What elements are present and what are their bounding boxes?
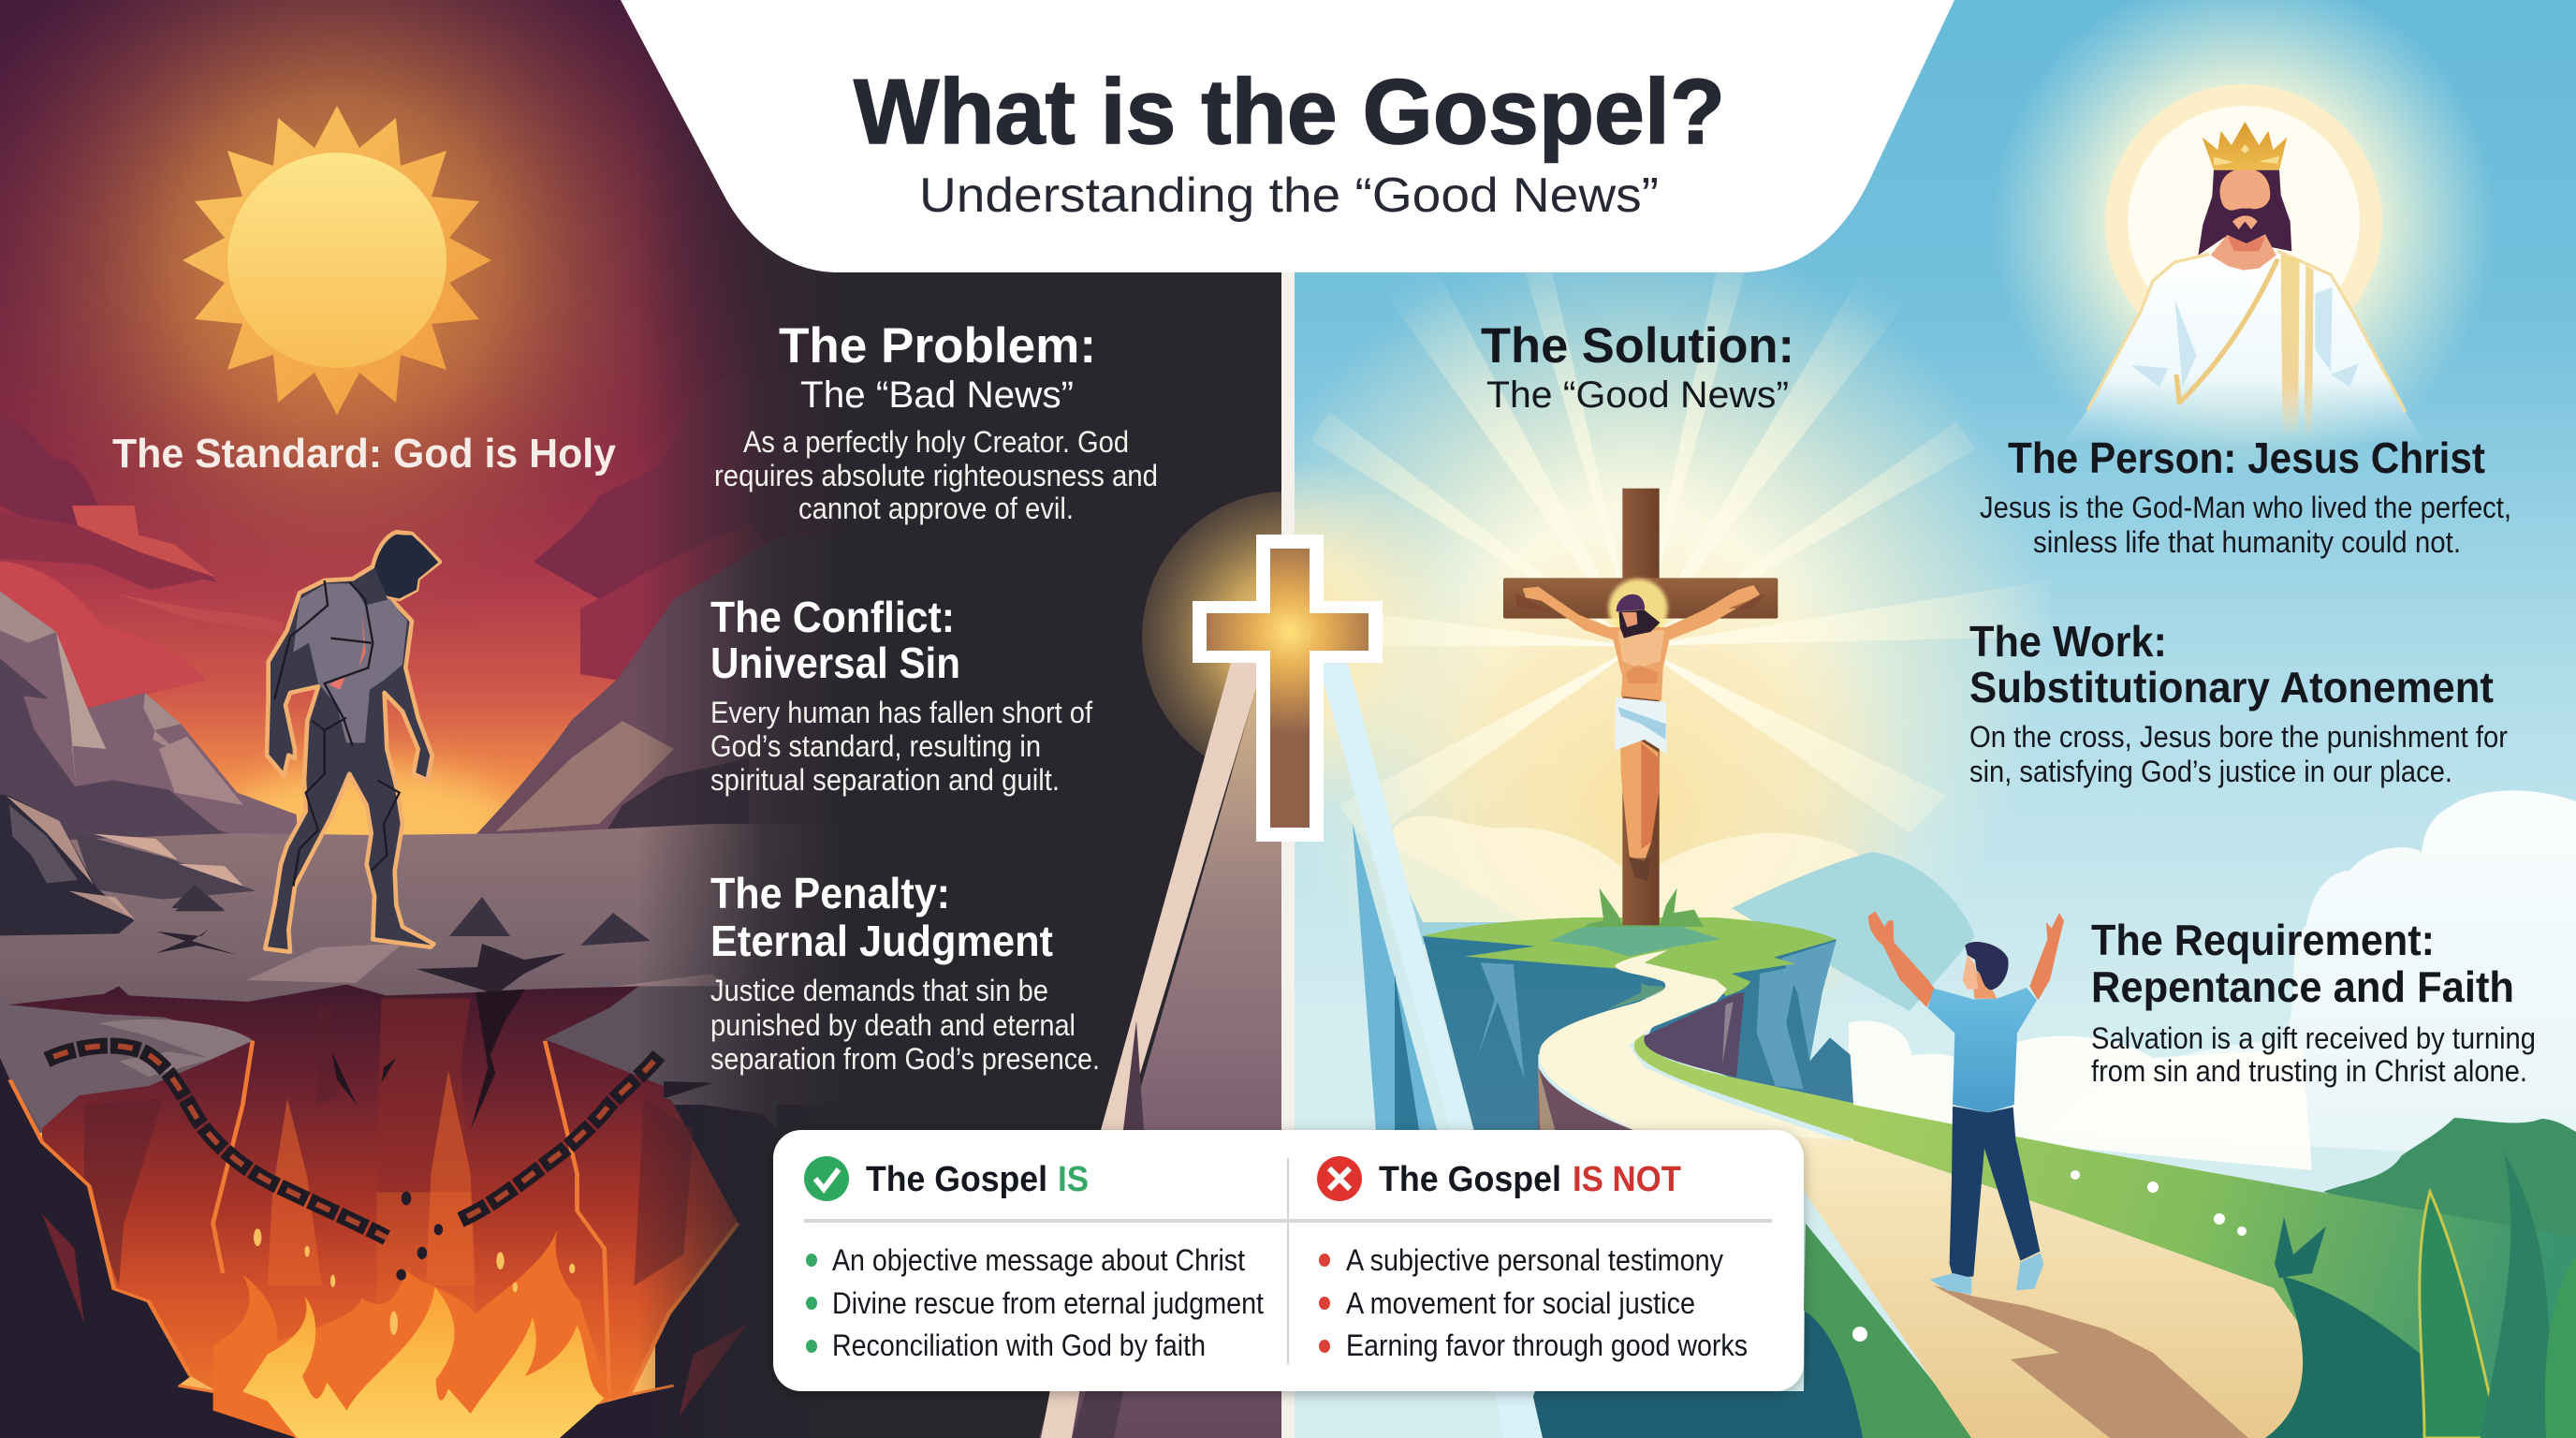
person shadow xyxy=(1933,1285,2248,1438)
cracked ground plateau xyxy=(0,794,824,1133)
robe xyxy=(2062,251,2424,443)
list: gospel is: Reconciliation with God by faith xyxy=(832,1328,1206,1362)
figure: person with raised arms xyxy=(1868,911,2064,1295)
dark rock behind pit's right wall xyxy=(655,1105,831,1438)
rock ledges xyxy=(7,1005,249,1128)
block: the penalty: Justice demands that sin be xyxy=(710,974,1048,1007)
glow disc behind the cross, dark side xyxy=(1142,492,1281,771)
block: the penalty: The Penalty: xyxy=(710,869,950,917)
subtitle: Understanding the “Good News” xyxy=(919,169,1659,223)
block: the work: sin, satisfying God’s justice in our place. xyxy=(1969,755,2452,788)
block: the solution: The “Good News” xyxy=(1486,374,1789,416)
clouds behind the figure xyxy=(0,374,805,880)
flames xyxy=(213,1229,609,1438)
block: the person: Jesus is the God-Man who lived the perfect, xyxy=(1980,491,2511,524)
big glowing cross in the centre xyxy=(1193,535,1383,842)
light rays behind the cross xyxy=(1310,272,2041,843)
block: the conflict: The Conflict: xyxy=(710,593,955,641)
figure: fallen man xyxy=(265,532,440,952)
block: the penalty: separation from God’s presence. xyxy=(710,1042,1100,1076)
icon: red cross xyxy=(1317,1156,1362,1201)
block: the solution: The Solution: xyxy=(1481,318,1794,374)
icon: crown xyxy=(2203,122,2287,170)
list: gospel is not: Earning favor through good works xyxy=(1346,1328,1748,1362)
block: the person: sinless life that humanity could not. xyxy=(2033,525,2461,559)
block: the conflict: God’s standard, resulting in xyxy=(710,729,1041,763)
blue path edge on right side xyxy=(1318,663,1543,1438)
block: the conflict: spiritual separation and guilt. xyxy=(710,763,1060,797)
block: the conflict: Every human has fallen short of xyxy=(710,696,1092,729)
cross and crucified figure xyxy=(1503,489,1778,927)
block: the problem xyxy=(714,318,1158,525)
list: gospel is: Divine rescue from eternal judgment xyxy=(832,1286,1264,1320)
list: gospel is not xyxy=(1319,1243,1748,1362)
heading: the gospel is: The Gospel xyxy=(866,1160,1047,1199)
block: the problem: requires absolute righteousness and xyxy=(714,459,1158,492)
lower road xyxy=(1632,1128,2380,1438)
block: the conflict xyxy=(710,593,1092,797)
mountains xyxy=(0,536,936,861)
block: the requirement: The Requirement: xyxy=(2091,916,2435,964)
glow beside big cross, light side xyxy=(1295,468,1433,794)
list: gospel is not: A movement for social justice xyxy=(1346,1286,1695,1320)
heading: the gospel is not: The Gospel xyxy=(1379,1160,1561,1199)
center light path on dark side xyxy=(1039,663,1281,1438)
block: the work xyxy=(1969,617,2508,788)
block: the work: The Work: xyxy=(1969,617,2167,666)
plants xyxy=(1852,1152,2576,1438)
block: the solution xyxy=(1481,318,1794,416)
heading: the gospel is not: IS NOT xyxy=(1573,1160,1681,1199)
list: gospel is xyxy=(806,1243,1264,1362)
block: the requirement xyxy=(2091,916,2536,1088)
island with winding path xyxy=(1423,917,1853,1145)
dark rocks xyxy=(0,1058,298,1438)
green field and winding road xyxy=(1423,917,2576,1438)
block: the penalty xyxy=(710,869,1100,1076)
block: the work: Substitutionary Atonement xyxy=(1969,663,2494,712)
block: the requirement: Salvation is a gift received by turning xyxy=(2091,1021,2536,1055)
fiery pit xyxy=(0,985,777,1438)
central white divider xyxy=(1281,272,1295,1438)
left panel: the problem scene xyxy=(0,0,1281,1438)
block: the work: On the cross, Jesus bore the punishment for xyxy=(1969,720,2508,754)
block: the problem: The Problem: xyxy=(779,318,1096,374)
dark text backdrop xyxy=(637,0,1281,1438)
block: the person xyxy=(1980,433,2511,559)
far bushes xyxy=(2323,1118,2576,1240)
glowing clouds and mountains xyxy=(1385,790,2576,1170)
block: the penalty: punished by death and eternal xyxy=(710,1008,1076,1042)
icon: blazing sun xyxy=(183,106,491,415)
block: the person: The Person: Jesus Christ xyxy=(2008,433,2485,482)
list: gospel is: An objective message about Christ xyxy=(832,1243,1245,1277)
wall streaks xyxy=(376,999,471,1192)
heading: the gospel is: IS xyxy=(1058,1160,1089,1199)
title: What is the Gospel? xyxy=(854,60,1725,163)
panel: gospel is / is not comparison card xyxy=(773,1130,1804,1391)
icon: broken chains xyxy=(47,1046,659,1238)
block: the requirement: Repentance and Faith xyxy=(2091,962,2514,1011)
hair and beard xyxy=(2198,170,2291,256)
block: the penalty: Eternal Judgment xyxy=(710,917,1053,965)
block: the problem: The “Bad News” xyxy=(800,374,1074,416)
white title banner xyxy=(621,0,1954,272)
heading: the standard: The Standard: God is Holy xyxy=(112,431,617,477)
right panel: the solution scene xyxy=(1295,0,2576,1438)
block: the requirement: from sin and trusting in Christ alone. xyxy=(2091,1054,2527,1088)
block: the conflict: Universal Sin xyxy=(710,638,960,687)
block: the problem: As a perfectly holy Creator. God xyxy=(743,425,1129,459)
block: the problem: cannot approve of evil. xyxy=(798,492,1074,525)
embers xyxy=(396,1192,443,1281)
jesus christ as king with halo xyxy=(1991,0,2496,476)
list: gospel is not: A subjective personal testimony xyxy=(1346,1243,1723,1277)
icon: green check xyxy=(804,1156,849,1201)
left boulders xyxy=(0,794,256,935)
